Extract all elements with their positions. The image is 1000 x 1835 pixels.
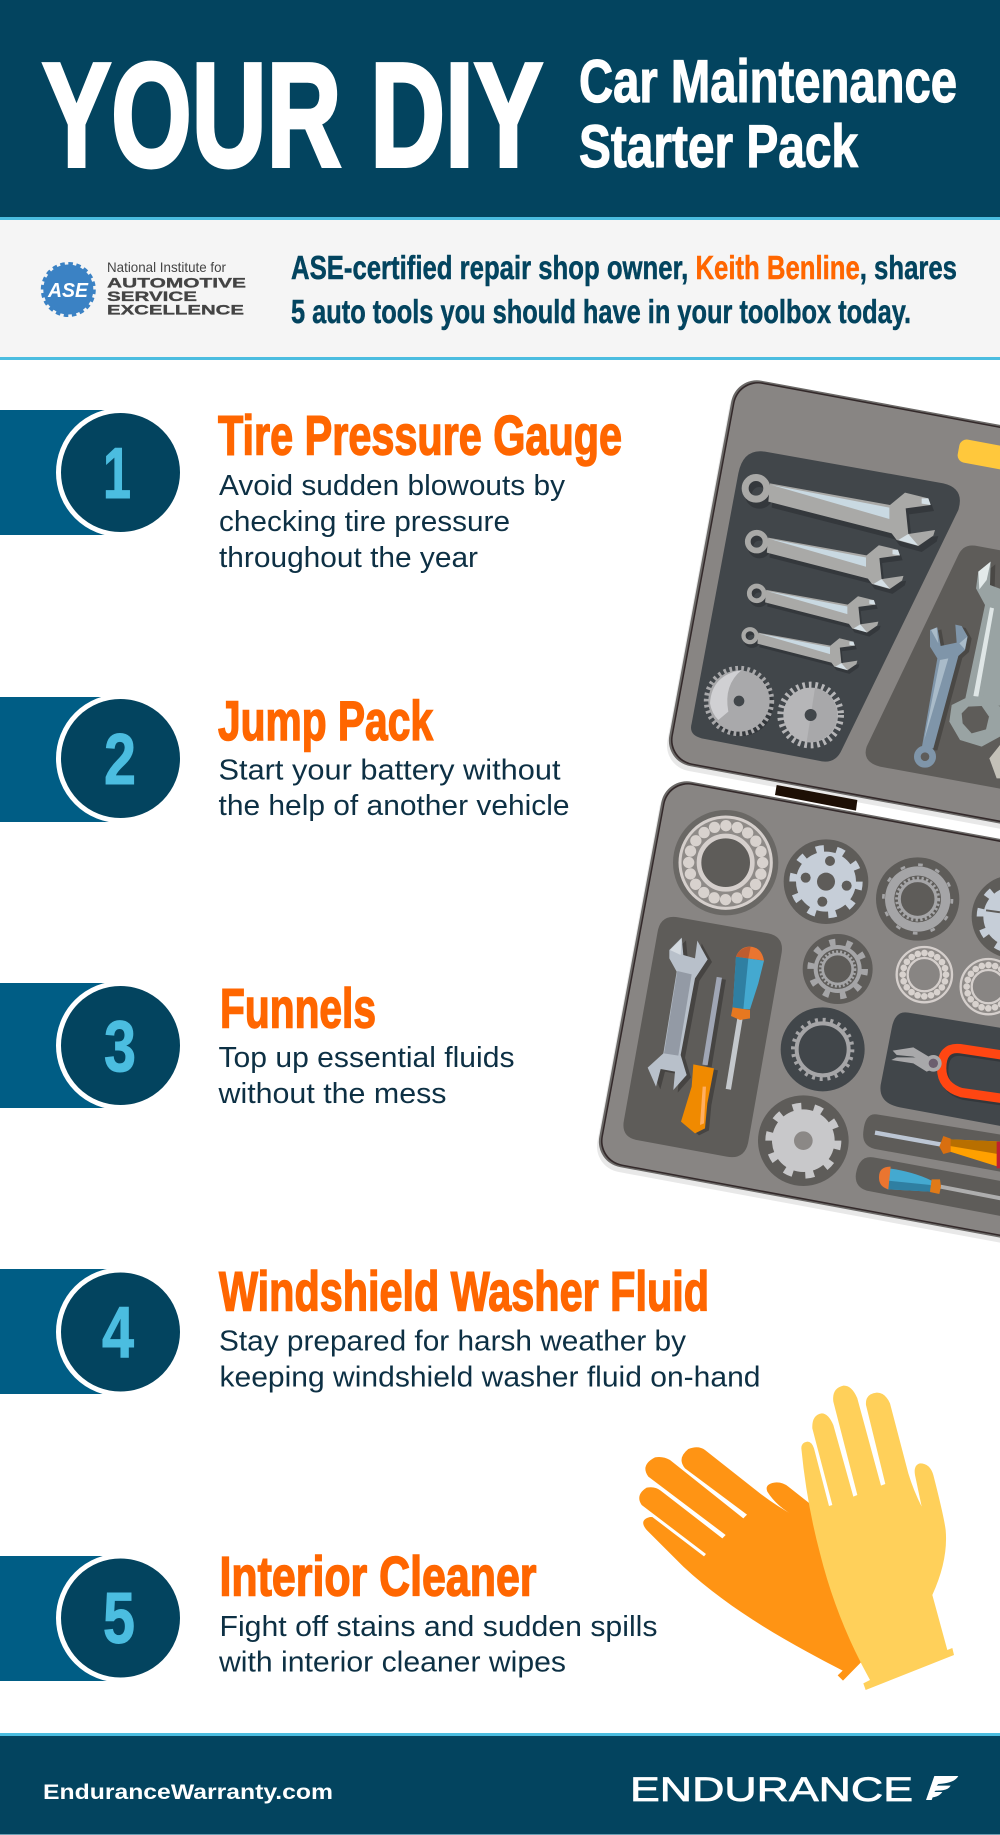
ASE logo xyxy=(43,259,246,318)
cut-off gear xyxy=(972,875,1000,958)
item 1: tire pressure gauge: Avoid sudden blowouts by xyxy=(219,470,566,502)
small gear xyxy=(803,934,873,1004)
subtitle: Starter Pack xyxy=(579,113,858,180)
subtitle xyxy=(579,48,957,180)
item 4: windshield washer fluid: Stay prepared for harsh weather by xyxy=(219,1326,687,1358)
screwdriver: orange handle xyxy=(681,977,723,1135)
item 4: windshield washer fluid: Windshield Washer Fluid xyxy=(219,1260,709,1322)
ring gear xyxy=(876,857,959,941)
footer xyxy=(0,1733,1000,1835)
item 5: interior cleaner: Interior Cleaner xyxy=(220,1544,536,1608)
dark ring gear xyxy=(781,1007,865,1091)
item 1: tire pressure gauge xyxy=(0,404,622,574)
Endurance logo xyxy=(630,1771,958,1809)
saw blades xyxy=(706,668,841,745)
main title: YOUR DIY xyxy=(42,33,543,198)
hinge xyxy=(775,785,857,811)
item 4: windshield washer fluid xyxy=(0,1260,760,1394)
item 3: funnels: Top up essential fluids xyxy=(218,1042,514,1074)
item 3: funnels: 3 xyxy=(104,1007,136,1087)
intro text: ASE-certified repair shop owner, Keith Benline, shares xyxy=(291,249,957,286)
item 5: interior cleaner xyxy=(0,1544,658,1681)
toolbox illustration xyxy=(593,376,1000,1313)
ASE logo: National Institute for xyxy=(107,259,226,275)
pliers xyxy=(891,1047,1000,1103)
large gear xyxy=(758,1095,849,1186)
item 4: windshield washer fluid: keeping windshield washer fluid on-hand xyxy=(220,1362,760,1394)
item 2: jump pack: Jump Pack xyxy=(218,689,434,752)
icon: wing E xyxy=(926,1776,958,1800)
small bearings xyxy=(897,947,1000,1014)
screwdriver slot top xyxy=(863,1114,1000,1174)
item 5: interior cleaner: with interior cleaner wipes xyxy=(218,1646,566,1678)
item 3: funnels xyxy=(0,976,514,1110)
item 5: interior cleaner: Fight off stains and sudden spills xyxy=(220,1611,658,1643)
grey tool panel xyxy=(866,545,1000,792)
yellow glove xyxy=(801,1386,954,1690)
intro band xyxy=(0,220,1000,360)
large bearing xyxy=(673,810,778,915)
screwdriver: blue handle xyxy=(728,947,764,1089)
ASE logo: SERVICE xyxy=(107,289,197,304)
toolbox upper lid xyxy=(663,376,1000,912)
item 2: jump pack xyxy=(0,689,570,822)
wrench set xyxy=(743,477,938,674)
item 4: windshield washer fluid: 4 xyxy=(102,1293,134,1373)
gloves illustration xyxy=(639,1386,954,1690)
gear with holes xyxy=(784,839,868,924)
website: EnduranceWarranty.com xyxy=(43,1781,333,1804)
item 3: funnels: Funnels xyxy=(220,976,376,1040)
Endurance logo: ENDURANCE xyxy=(630,1771,913,1809)
handle xyxy=(956,438,1000,479)
item 1: tire pressure gauge: Tire Pressure Gauge xyxy=(218,404,622,466)
large grey wrench xyxy=(949,562,1000,778)
dark tool panel xyxy=(691,451,960,762)
item 1: tire pressure gauge: throughout the year xyxy=(219,542,478,574)
ASE logo: AUTOMOTIVE xyxy=(107,276,246,290)
item 3: funnels: without the mess xyxy=(217,1078,446,1110)
toolbox lower tray xyxy=(593,777,1000,1313)
ASE logo: EXCELLENCE xyxy=(107,302,244,318)
item 1: tire pressure gauge: 1 xyxy=(103,434,131,514)
blue wrench xyxy=(917,625,972,764)
screwdriver slot bottom xyxy=(856,1157,1000,1218)
item 5: interior cleaner: 5 xyxy=(103,1579,135,1659)
item 2: jump pack: 2 xyxy=(104,720,136,800)
header banner xyxy=(0,0,1000,220)
left tool panel xyxy=(623,917,782,1157)
item 2: jump pack: the help of another vehicle xyxy=(218,790,570,822)
ASE logo: ASE xyxy=(47,280,89,302)
double open-end wrench xyxy=(648,938,712,1093)
orange glove xyxy=(639,1447,862,1681)
item 2: jump pack: Start your battery without xyxy=(218,754,560,786)
item 1: tire pressure gauge: checking tire pressure xyxy=(219,506,510,538)
pliers panel xyxy=(880,1012,1000,1128)
intro text xyxy=(291,249,957,330)
